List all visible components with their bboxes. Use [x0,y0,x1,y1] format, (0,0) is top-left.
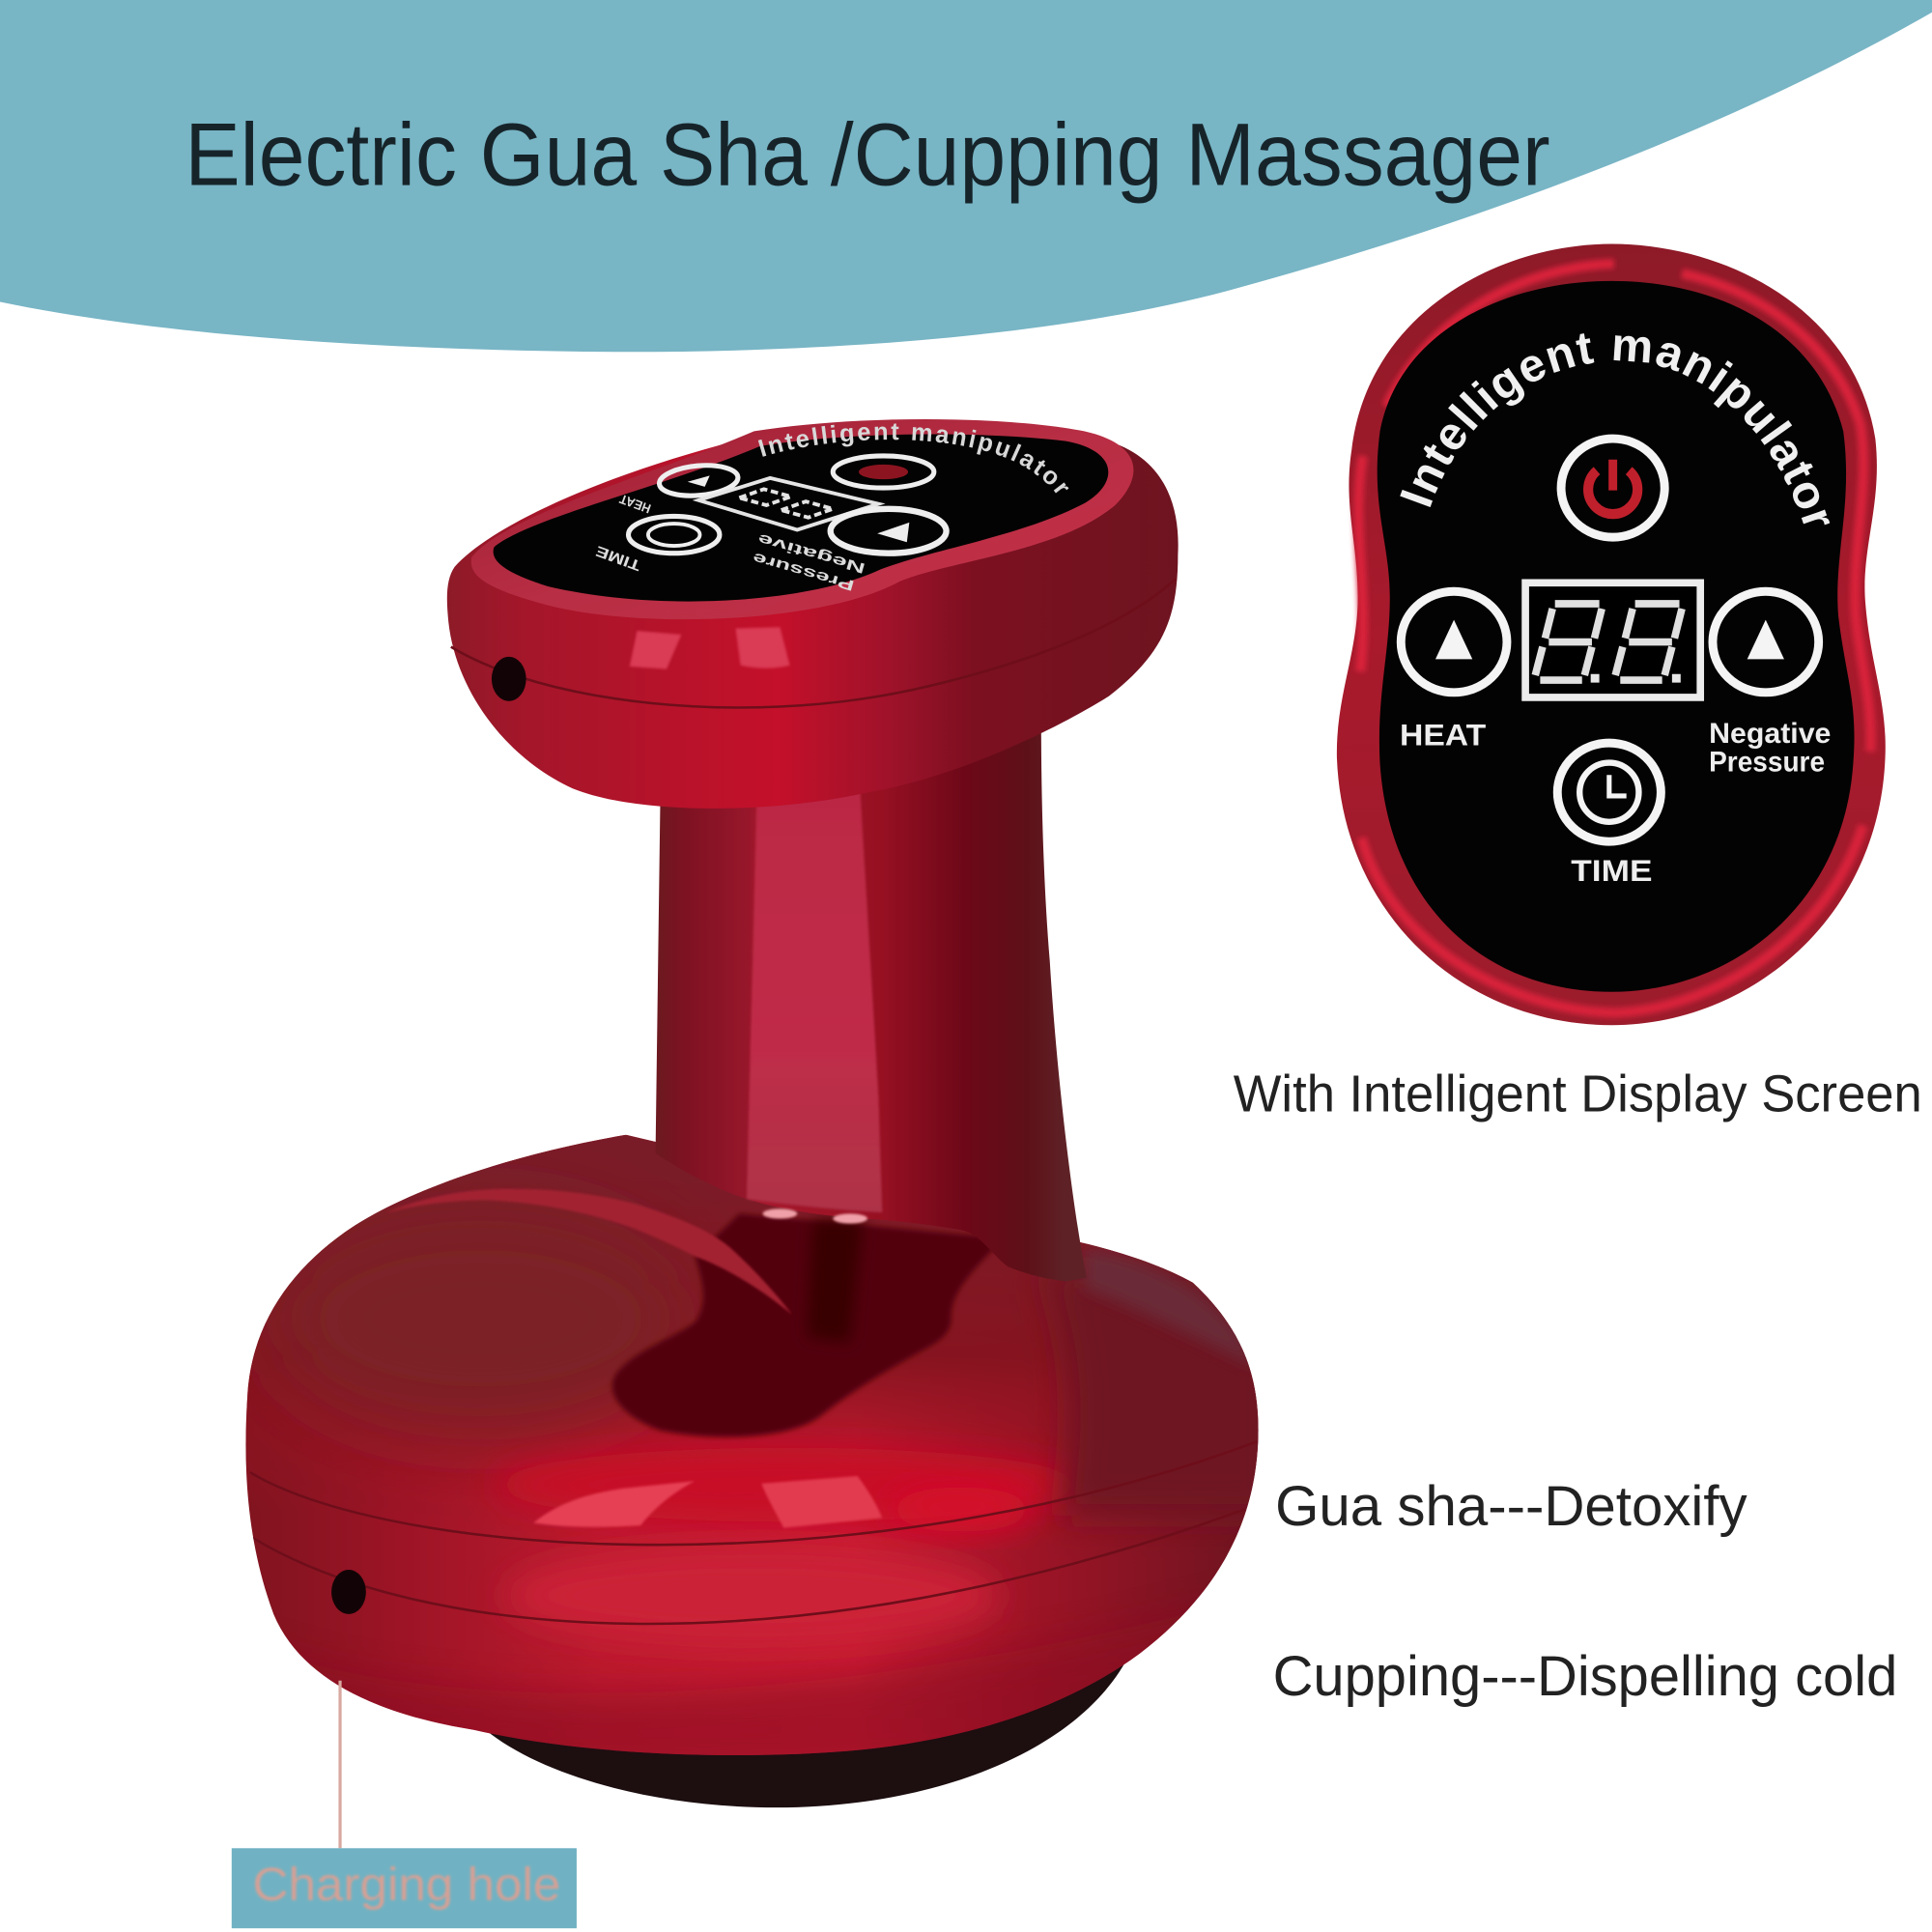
screen text: Intelligent manipulator [757,423,1068,493]
curved swoosh [384,1189,792,1315]
screen time button [629,516,720,554]
display screen caption: With Intelligent Display Screen [1234,1066,1922,1123]
head seam [451,579,1176,707]
charging hole label: Charging hole [252,1859,560,1911]
dark vertical core [807,1220,863,1343]
lower edge shade [292,1598,1198,1755]
negative pressure label: Pressure [1709,746,1825,778]
icon: power button [1561,439,1664,537]
heat label: HEAT [1400,718,1487,753]
head [447,423,1179,809]
neck collar highlights [763,1208,867,1224]
dome right dark facet [1041,1269,1282,1516]
function text: gua sha: Gua sha---Detoxify [1275,1475,1747,1538]
icon: time button [1557,743,1661,841]
dome right grey top [1084,1247,1260,1368]
panel ring highlights [1358,264,1871,1012]
screen power button [833,456,934,488]
head top surface [471,419,1133,619]
charging hole label [232,1848,577,1928]
main highlight right [761,1476,882,1528]
black suction base [474,1651,1131,1807]
neck [656,721,1087,1282]
icon: head hole [492,657,526,701]
screen labels: HEAT [618,492,653,516]
screen labels: TIME [593,543,643,575]
body bright band [504,1556,1003,1634]
digital display [1525,582,1700,697]
head highlights [630,627,790,669]
screen labels: Negative [756,530,867,577]
dome left matte patch [271,1208,690,1430]
right highlight glow [887,1488,1035,1531]
icon: negative pressure up button [1713,591,1819,693]
time label: TIME [1571,853,1652,888]
screen negative pressure button [831,509,947,554]
neck facet [747,788,882,1212]
icon: charging hole [331,1570,366,1614]
function text: cupping: Cupping---Dispelling cold [1273,1645,1897,1708]
main highlight left [533,1481,695,1527]
product: massager device [245,419,1259,1808]
dome red glow [493,1448,1084,1521]
dark reflection under collar [612,1213,1005,1437]
screen heat button [658,463,739,498]
screen [494,435,1108,602]
dome upper shading [245,1134,1258,1486]
lower body dome [234,1122,1282,1775]
charging hole leader line [339,1681,341,1848]
icon: heat up button [1401,591,1507,693]
seam lines [250,1441,1257,1624]
screen display [698,478,878,529]
teal header banner [0,0,1932,352]
panel: control panel close-up [1337,243,1886,1026]
negative pressure label: Negative [1709,718,1831,750]
curved panel label: Intelligent manipulator [1400,333,1830,526]
negative pressure label [1709,718,1831,778]
panel black face [1378,281,1855,992]
screen labels: Pressure [751,550,856,594]
title: Electric Gua Sha /Cupping Massager [185,105,1550,204]
screen labels [593,492,867,594]
panel red outer ring [1337,244,1886,1025]
